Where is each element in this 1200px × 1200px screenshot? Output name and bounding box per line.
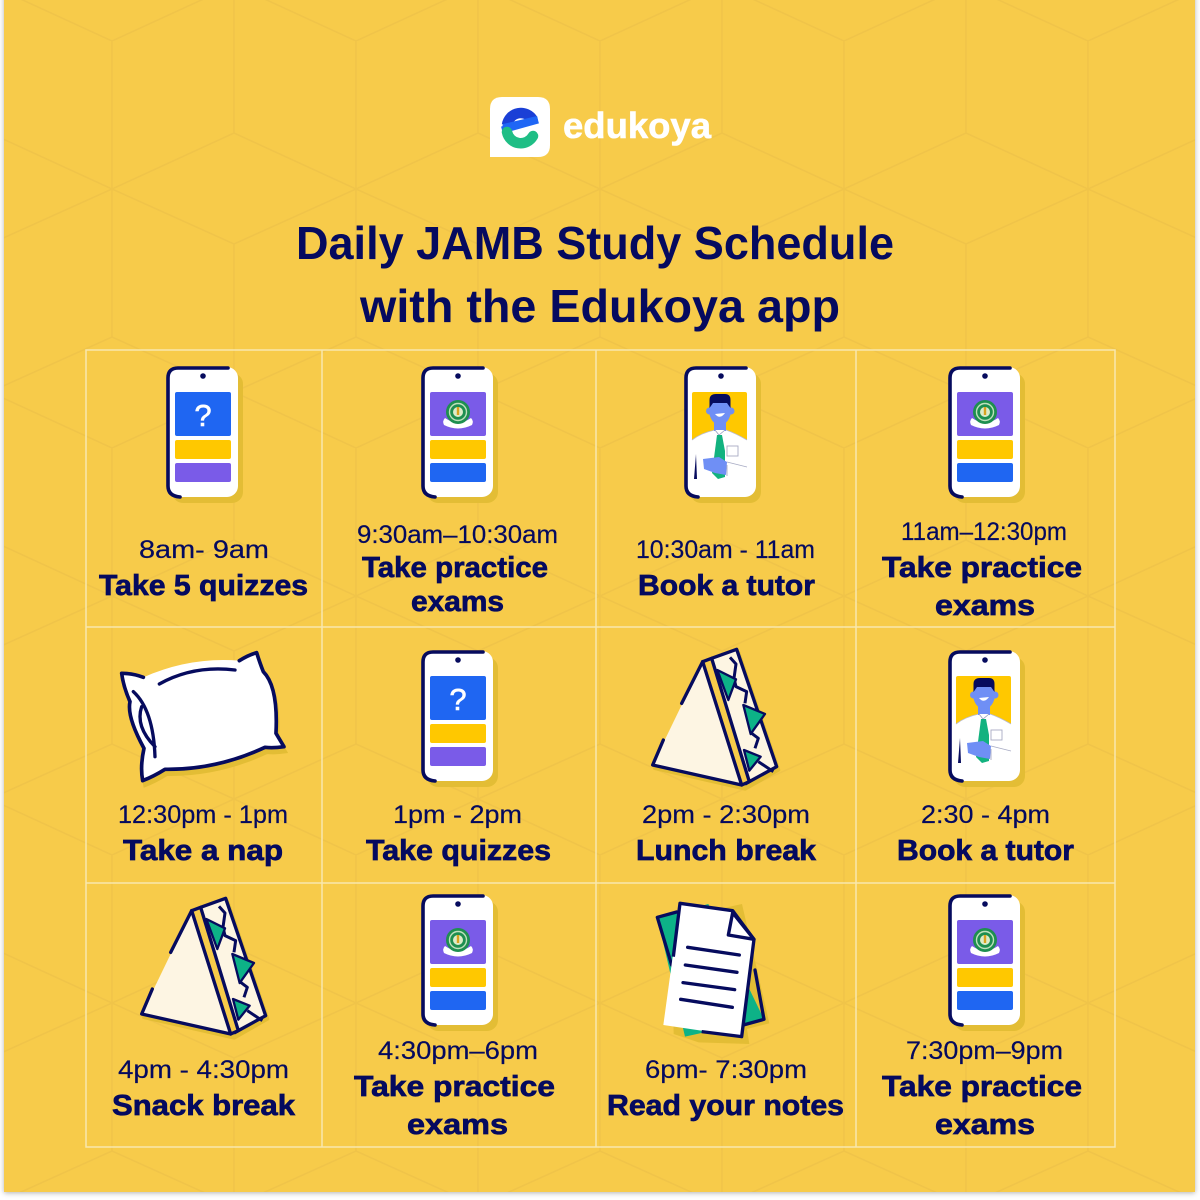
task label: Take a nap [123,835,283,867]
time label: 12:30pm - 1pm [118,801,288,829]
title: with the Edukoya app [359,280,840,332]
time label: 9:30am–10:30am [357,521,558,549]
cell: 9:30am-10:30am [357,367,558,618]
icon: sandwich [653,649,779,789]
icon: phone with quiz: ? [449,682,467,717]
icon: phone with JAMB seal [949,367,1025,503]
task label: exams [935,1109,1035,1141]
task label: Snack break [112,1090,296,1122]
icon: phone with JAMB seal [422,895,498,1031]
task label: exams [407,1109,508,1141]
task label: Take quizzes [366,835,551,867]
cell: 6pm-7:30pm [607,903,844,1122]
time label: 1pm - 2pm [393,801,522,829]
task label: Take practice [354,1071,555,1103]
time label: 7:30pm–9pm [906,1037,1063,1065]
schedule grid lines [86,350,1115,1147]
logo wordmark: edukoya [563,105,712,146]
cell: 12:30pm-1pm [118,653,288,867]
task label: Take 5 quizzes [99,570,308,602]
icon: phone with quiz: ? [194,398,212,433]
cell: 7:30pm-9pm [882,895,1082,1141]
time label: 6pm- 7:30pm [645,1056,807,1084]
time label: 2:30 - 4pm [921,801,1050,829]
cell: 8am-9am [99,367,308,602]
time label: 8am- 9am [139,536,269,564]
task label: Book a tutor [897,835,1074,867]
task label [882,552,1082,622]
cell: 2pm-2:30pm [636,649,817,867]
task label [362,552,548,618]
time label: 4pm - 4:30pm [118,1056,289,1084]
task label: exams [935,590,1035,622]
icon: notes [657,903,769,1044]
task label: Book a tutor [638,570,815,602]
time label: 2pm - 2:30pm [642,801,810,829]
task label: exams [411,586,504,618]
time label: 10:30am - 11am [636,536,815,564]
icon: Edukoya app bubble [490,97,550,157]
icon: phone with JAMB seal [422,367,498,503]
task label: Take practice [362,552,548,584]
task label: Read your notes [607,1090,844,1122]
icon: phone with JAMB seal [949,895,1025,1031]
time label: 11am–12:30pm [901,518,1067,546]
cell: 2:30-4pm [897,651,1074,867]
task label [882,1071,1082,1141]
cell: 4pm-4:30pm [112,898,296,1122]
title: Daily JAMB Study Schedule [296,217,894,269]
title [296,217,894,332]
icon: phone with tutor [949,651,1025,787]
cell: 1pm-2pm [366,651,551,867]
time label: 4:30pm–6pm [378,1037,538,1065]
icon: phone with tutor [685,367,761,503]
task label: Take practice [882,1071,1082,1103]
task label [354,1071,555,1141]
cell: 4:30pm-6pm [354,895,555,1141]
icon: phone with quiz [167,367,243,503]
task label: Take practice [882,552,1082,584]
task label: Lunch break [636,835,817,867]
icon: pillow [122,653,286,786]
cell: 10:30am-11am [636,367,815,602]
icon: phone with quiz [422,651,498,787]
cell: 11am-12:30pm [882,367,1082,622]
logo [490,97,712,157]
icon: sandwich [142,898,268,1038]
